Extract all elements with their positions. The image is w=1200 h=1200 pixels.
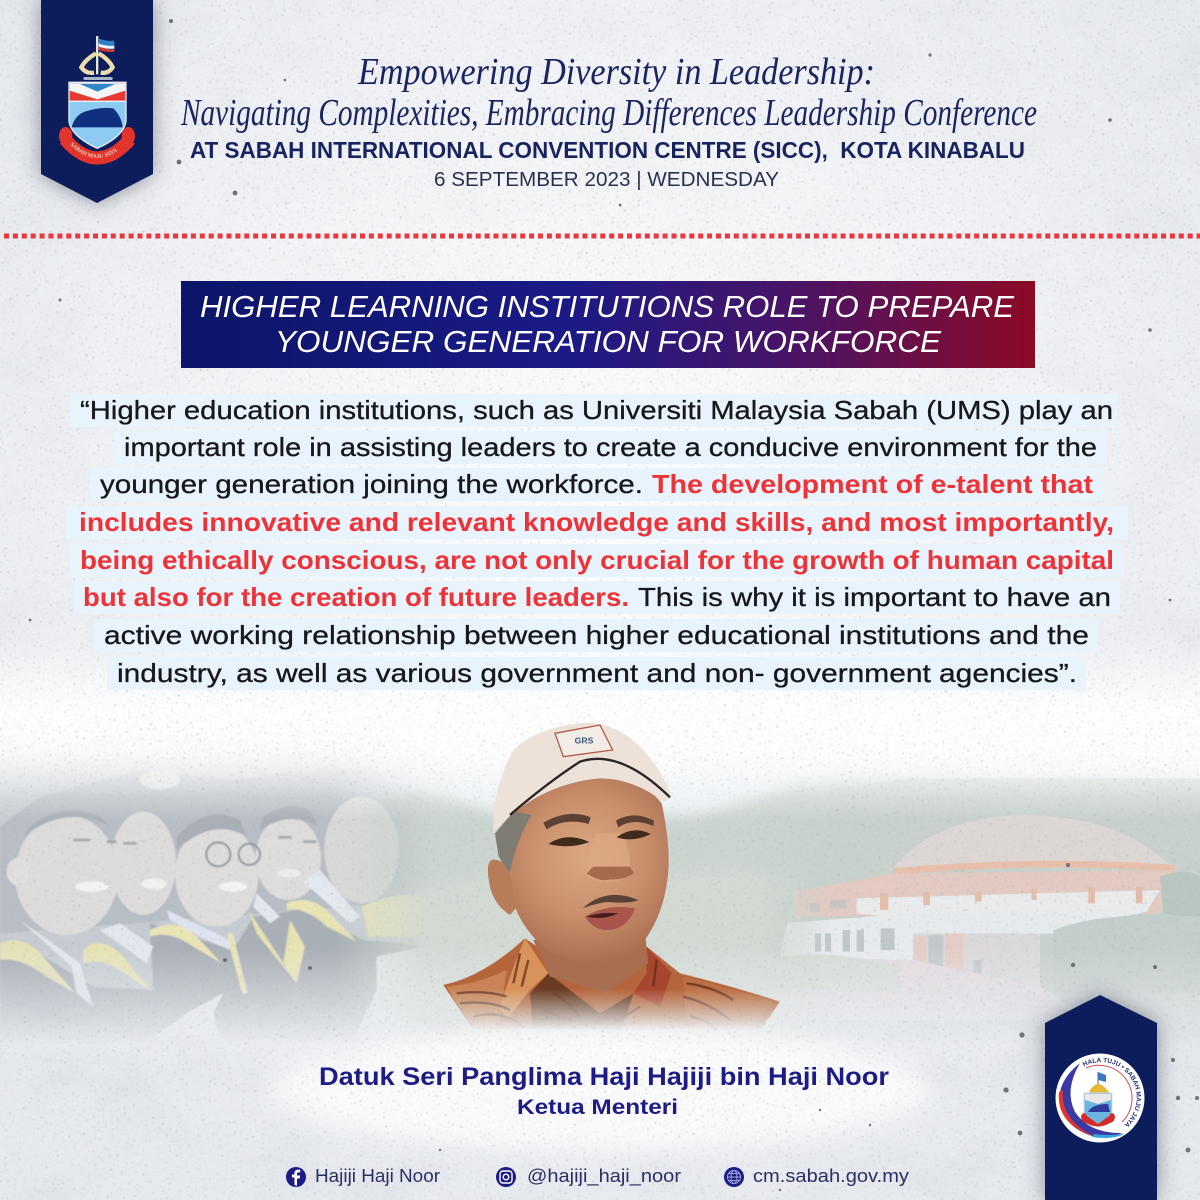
quote text block: active working relationship between higher educational institutions and the <box>104 620 1089 650</box>
soft glow behind speaker name <box>270 1030 930 1150</box>
graduates photo <box>0 764 413 1033</box>
quote text block: The development of e-talent that <box>652 469 1093 499</box>
facebook label: Hajiji Haji Noor <box>315 1166 440 1186</box>
icon: instagram <box>496 1167 516 1187</box>
Hala Tuju logo <box>1056 1054 1144 1142</box>
title banner: YOUNGER GENERATION FOR WORKFORCE <box>275 324 941 359</box>
quote text block: industry, as well as various government and non- government agencies”. <box>117 658 1077 688</box>
speaker role: Ketua Menteri <box>517 1096 678 1119</box>
quote text block: being ethically conscious, are not only crucial for the growth of human capital <box>80 545 1114 575</box>
quote text block <box>66 394 1128 690</box>
convention building <box>760 778 1200 1020</box>
face <box>488 775 669 993</box>
quote text block: but also for the creation of future leaders. <box>83 582 629 612</box>
white fade band under the quote <box>0 640 1200 820</box>
shirt <box>444 938 780 1028</box>
conference header text <box>180 51 1037 191</box>
speaker name: Datuk Seri Panglima Haji Hajiji bin Haji Noor <box>319 1063 889 1091</box>
instagram label: @hajiji_haji_noor <box>527 1166 681 1187</box>
speaker portrait <box>443 723 780 1040</box>
state crest <box>59 36 135 165</box>
conference title line 1: Empowering Diversity in Leadership: <box>357 51 875 93</box>
cap <box>493 723 672 833</box>
icon: globe <box>724 1167 744 1187</box>
quote text block: important role in assisting leaders to create a conducive environment for the <box>124 432 1097 462</box>
quote text block: younger generation joining the workforce. <box>100 469 643 499</box>
date: 6 SEPTEMBER 2023 | WEDNESDAY <box>434 169 779 191</box>
venue: AT SABAH INTERNATIONAL CONVENTION CENTRE (SICC), KOTA KINABALU <box>190 137 1025 163</box>
quote text block: includes innovative and relevant knowledge and skills, and most importantly, <box>79 507 1114 537</box>
ribbon: SABAH MAJU JAYA <box>70 142 118 158</box>
Hala Tuju logo: HALA TUJU • SABAH MAJU JAYA <box>1082 1058 1141 1127</box>
header banner with state crest <box>26 0 168 215</box>
cap: GRS <box>575 735 594 745</box>
title banner: HIGHER LEARNING INSTITUTIONS ROLE TO PREPARE <box>200 289 1014 324</box>
sky and hills <box>355 776 1200 1022</box>
background photo: graduates and convention building <box>0 763 1200 1033</box>
title banner <box>181 281 1035 368</box>
quote text block: “Higher education institutions, such as Universiti Malaysia Sabah (UMS) play an <box>80 395 1113 425</box>
dotted divider <box>4 234 1200 238</box>
footer banner with logo <box>1030 984 1172 1200</box>
website label: cm.sabah.gov.my <box>753 1166 909 1186</box>
quote text block: This is why it is important to have an <box>638 582 1111 612</box>
icon: facebook <box>286 1167 306 1187</box>
social links <box>286 1166 909 1187</box>
